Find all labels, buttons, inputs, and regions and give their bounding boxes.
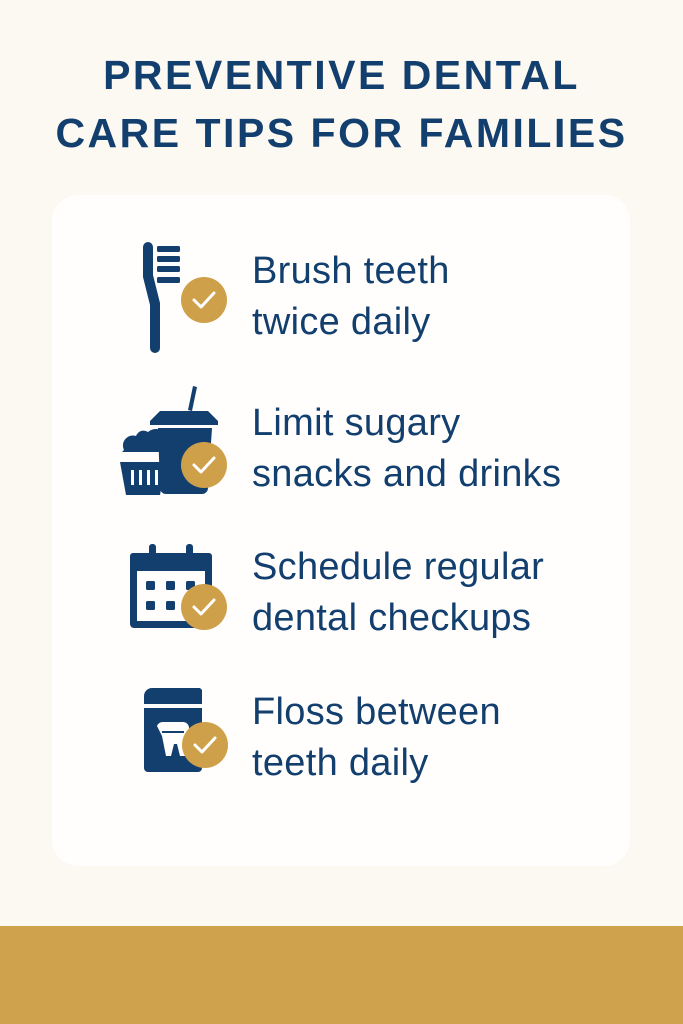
panel: tips card (52, 195, 630, 866)
text: tip 4 (252, 691, 501, 784)
title: CARE TIPS FOR FAMILIES (55, 110, 628, 156)
icon: calendar (130, 544, 212, 628)
icon: toothbrush (143, 242, 180, 353)
text: tip 1: twice daily (252, 301, 431, 343)
icon: cup and cupcake (120, 386, 218, 495)
text: tip 1: Brush teeth (252, 250, 450, 292)
title (55, 52, 628, 156)
text: tip 2: Limit sugary (252, 402, 460, 444)
icon: floss (144, 688, 202, 772)
text: tip 4: teeth daily (252, 742, 429, 784)
text: tip 1 (252, 250, 450, 343)
footer band (0, 926, 683, 1024)
text: tip 3 (252, 546, 544, 639)
title: PREVENTIVE DENTAL (103, 52, 580, 98)
text: tip 3: Schedule regular (252, 546, 544, 588)
text: tip 2 (252, 402, 561, 495)
text: tip 3: dental checkups (252, 597, 531, 639)
text: tip 4: Floss between (252, 691, 501, 733)
icon: check badges (181, 277, 228, 768)
text: tip 2: snacks and drinks (252, 453, 561, 495)
